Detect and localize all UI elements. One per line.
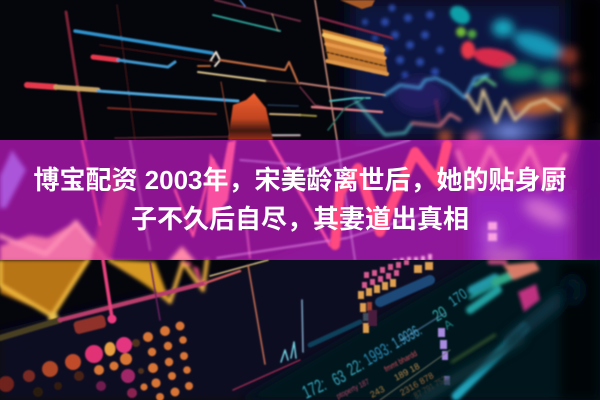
- teal number readout: 22:: [344, 356, 367, 380]
- pink axis and cursor: [0, 260, 303, 390]
- blue and teal trend lines: [355, 75, 560, 135]
- lower-left yellow area chart: [0, 260, 207, 322]
- teal number readout: [299, 285, 470, 400]
- title: 子不久后自尽，其妻道出真相: [131, 204, 469, 234]
- thin pink chart strokes: [82, 140, 420, 260]
- pale squares lower band: [393, 222, 497, 261]
- center chart lines: [300, 0, 392, 140]
- magenta title band: [0, 140, 600, 260]
- blurred right-hand data blobs: [446, 2, 518, 71]
- orange and pink dot grid: [0, 314, 193, 400]
- pink wedge peak: [205, 140, 236, 225]
- blue dot cloud: [362, 4, 444, 78]
- small pink and yellow readout: 243: [368, 384, 386, 400]
- far-right blurred blobs: [420, 0, 600, 400]
- charts seen through the band: [0, 140, 600, 260]
- small pink and yellow readout: fmmt bhardd: [382, 348, 419, 374]
- pale zigzag on the right: [458, 148, 565, 190]
- small pink and yellow readout: [335, 348, 449, 400]
- teal number readout: 20: [430, 303, 451, 326]
- teal number readout: 170: [445, 285, 470, 310]
- title: [33, 165, 567, 234]
- title: 博宝配资 2003年，宋美龄离世后，她的贴身厨: [33, 165, 567, 195]
- yellow data table: [322, 0, 388, 76]
- left pink peaks: [0, 150, 196, 262]
- teal number readout: A: [441, 316, 455, 333]
- teal number readout: 1993:: [361, 339, 395, 370]
- teal blurred bars lower right: [452, 262, 540, 396]
- small pink and yellow readout: 189 18: [392, 361, 421, 383]
- small pink and yellow readout: 2316 878: [398, 370, 436, 398]
- central red zigzag chart: [335, 145, 447, 245]
- hazy glow on the right: [445, 135, 600, 265]
- teal number readout: 1.9036.: [389, 321, 425, 352]
- orange peak chart: [228, 93, 273, 140]
- coloured square grid: [310, 260, 450, 400]
- top-left data lines: [27, 0, 300, 140]
- teal number readout: 63: [329, 367, 350, 390]
